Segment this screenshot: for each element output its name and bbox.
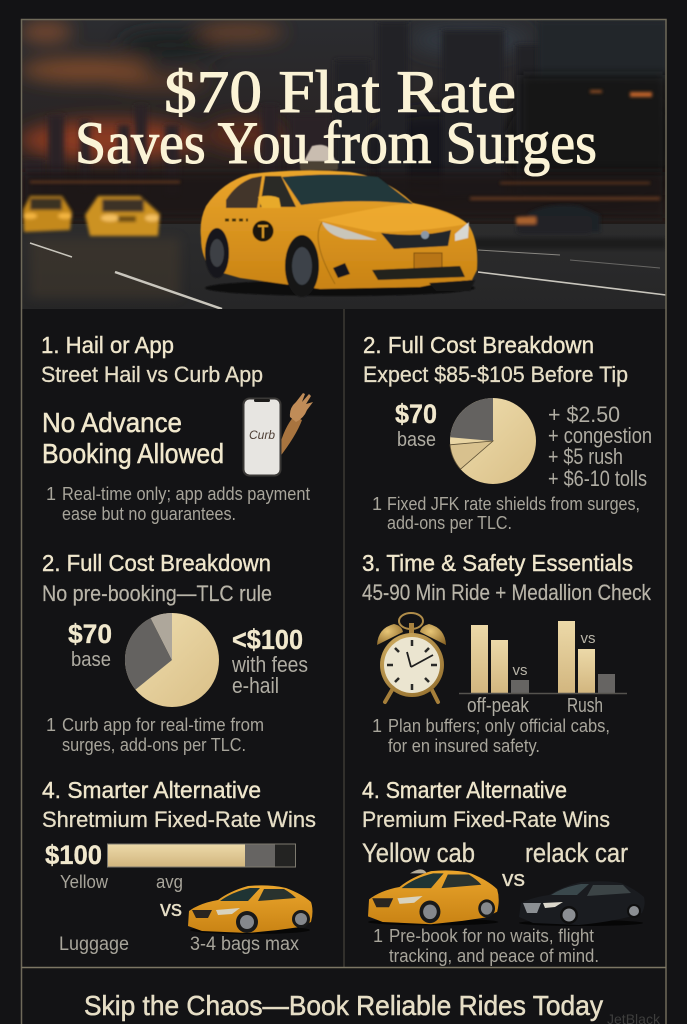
note	[373, 926, 599, 966]
base fare label: base	[397, 429, 436, 451]
sunset clouds	[22, 20, 525, 174]
note: 1	[46, 484, 56, 504]
road	[22, 224, 666, 309]
icon: yellow taxi	[188, 885, 312, 934]
panel: smarter alternative, yellow cab vs black car	[362, 777, 645, 966]
comparison labels: Yellow cab	[362, 838, 475, 868]
icon: alarm clock	[377, 613, 446, 702]
subheading: Premium Fixed-Rate Wins	[362, 807, 610, 832]
callout: no advance booking	[42, 407, 224, 469]
stacked price bar	[108, 844, 296, 867]
note: Real-time only; app adds payment	[62, 484, 310, 504]
heading: 4. Smarter Alternative	[42, 777, 261, 803]
note: 1	[46, 715, 56, 735]
base fare label	[68, 619, 112, 671]
city lights band	[22, 172, 666, 218]
bar labels: vs	[160, 896, 182, 921]
note: add-ons per TLC.	[387, 513, 512, 533]
icon: black car	[519, 881, 645, 926]
subheading: Expect $85-$105 Before Tip	[363, 362, 628, 387]
note	[372, 494, 640, 533]
total with fees label: <$100	[232, 624, 303, 655]
main yellow taxi	[201, 145, 477, 297]
subheading: Street Hail vs Curb App	[41, 362, 263, 387]
add-on fee list: + $5 rush	[548, 444, 623, 469]
city skyline	[26, 110, 279, 170]
base fare label: $70	[68, 619, 112, 649]
pie chart	[125, 613, 219, 707]
panel: full cost breakdown, no pre-booking	[42, 550, 308, 755]
total with fees label: with fees	[231, 652, 308, 677]
call to action: Skip the Chaos—Book Reliable Rides Today	[84, 990, 603, 1021]
note: 1	[373, 926, 383, 946]
luggage row: 3-4 bags max	[190, 934, 299, 955]
bar chart: off-peak vs rush: vs	[512, 662, 528, 679]
heading: 2. Full Cost Breakdown	[42, 550, 271, 576]
icon: yellow cab	[368, 869, 499, 925]
note: Pre-book for no waits, flight	[389, 926, 594, 946]
note	[46, 715, 264, 755]
bar chart: off-peak vs rush: vs	[580, 630, 596, 647]
panel: full cost breakdown, expect $85-$105	[363, 332, 652, 533]
base fare label	[395, 399, 437, 451]
heading: 4. Smarter Alternative	[362, 777, 567, 803]
panel: smarter alternative, price bar	[42, 777, 316, 955]
total with fees label: e-hail	[232, 673, 279, 698]
comparison labels	[362, 838, 628, 891]
base fare label: $70	[395, 399, 437, 429]
add-on fee list: + congestion	[548, 423, 652, 448]
bar labels: avg	[156, 872, 183, 892]
total with fees label	[231, 624, 308, 698]
add-on fee list	[548, 402, 652, 491]
heading: 1. Hail or App	[41, 332, 174, 358]
callout: no advance booking: Booking Allowed	[42, 438, 224, 469]
title: Saves You from Surges	[75, 110, 597, 176]
icon: hand waving	[279, 393, 313, 458]
title: $70 Flat Rate	[164, 59, 516, 125]
title	[75, 59, 597, 176]
icon: phone with Curb app	[244, 398, 280, 476]
add-on fee list: + $6-10 tolls	[548, 466, 647, 491]
note: ease but no guarantees.	[62, 504, 236, 524]
note: surges, add-ons per TLC.	[62, 735, 246, 755]
background taxi left	[23, 196, 72, 232]
note: 1	[372, 716, 382, 736]
callout: no advance booking: No Advance	[42, 407, 182, 438]
subheading: Shretmium Fixed-Rate Wins	[42, 807, 316, 832]
note: Curb app for real-time from	[62, 715, 264, 735]
hero image panel	[20, 20, 680, 309]
bar chart: off-peak vs rush: Rush	[567, 695, 603, 717]
panel: time and safety	[362, 550, 652, 756]
bar labels: Yellow	[60, 872, 109, 892]
note: Plan buffers; only official cabs,	[388, 716, 610, 736]
luggage row	[59, 934, 299, 955]
note	[372, 716, 610, 756]
comparison labels: relack car	[525, 838, 628, 868]
bar chart: off-peak vs rush: off-peak	[467, 695, 530, 717]
heading: 2. Full Cost Breakdown	[363, 332, 594, 358]
luggage row: Luggage	[59, 934, 129, 955]
note: tracking, and peace of mind.	[389, 946, 599, 966]
subheading: No pre-booking—TLC rule	[42, 581, 272, 606]
base fare label: base	[71, 649, 111, 671]
panel: hail or app	[41, 332, 313, 524]
bar labels	[60, 872, 183, 921]
note	[46, 484, 310, 524]
dark car in background	[516, 205, 600, 234]
add-on fee list: + $2.50	[548, 402, 620, 427]
comparison labels: vs	[502, 866, 525, 891]
price label: $100	[45, 840, 102, 870]
note: Fixed JFK rate shields from surges,	[387, 494, 640, 514]
note: 1	[372, 494, 382, 514]
bar chart: off-peak vs rush	[459, 621, 627, 717]
heading: 3. Time & Safety Essentials	[362, 550, 633, 576]
note: for en insured safety.	[388, 736, 540, 756]
pie chart	[450, 398, 536, 484]
road markings	[30, 243, 666, 309]
icon: phone with Curb app: Curb	[249, 428, 275, 442]
background taxi centre	[85, 196, 160, 236]
